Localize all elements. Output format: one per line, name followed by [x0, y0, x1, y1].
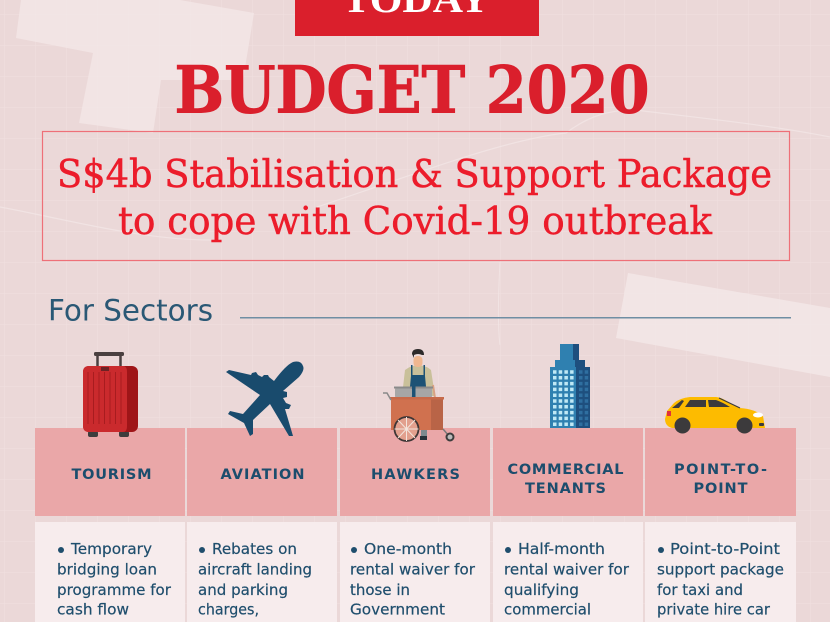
subtitle box [42, 132, 790, 260]
panel: tourism: TOURISM [72, 467, 152, 483]
heading: For Sectors: For Sectors [48, 294, 213, 328]
card: aviation detail: and parking [198, 582, 288, 599]
panel: commercial tenants: TENANTS [525, 481, 606, 497]
card: commercial tenants detail: commercial [504, 602, 591, 618]
panel: hawkers [340, 428, 490, 516]
panel: commercial tenants [493, 428, 643, 516]
panel: tourism [35, 428, 185, 516]
card: aviation detail: charges, [198, 602, 259, 618]
card: tourism detail: Temporary [70, 541, 152, 558]
panel: point-to-point: POINT [694, 481, 748, 497]
card: tourism detail: bridging loan [57, 562, 157, 578]
card: point-to-point detail: private hire car [657, 602, 771, 618]
card: commercial tenants detail: Half-month [518, 541, 605, 558]
card: tourism detail: cash flow [57, 602, 129, 618]
card: point-to-point detail [645, 522, 796, 622]
card: hawkers detail: rental waiver for [350, 562, 476, 578]
card: point-to-point detail: support package [657, 562, 784, 578]
card: commercial tenants detail: qualifying [504, 582, 579, 599]
card: hawkers detail: Government [350, 602, 445, 618]
card: point-to-point detail: Point-to-Point [670, 541, 780, 558]
card: hawkers detail: those in [350, 582, 410, 599]
title: BUDGET 2020 [174, 52, 650, 128]
card: commercial tenants detail: rental waiver for [504, 562, 630, 578]
card: aviation detail [187, 522, 337, 622]
subtitle box: S$4b Stabilisation & Support Package [57, 152, 772, 196]
icon: yellow car [665, 397, 765, 434]
panel: commercial tenants: COMMERCIAL [508, 462, 624, 478]
card: commercial tenants detail [493, 522, 643, 622]
icon: airplane [226, 362, 304, 436]
card: tourism detail [35, 522, 185, 622]
subtitle box: to cope with Covid-19 outbreak [118, 199, 713, 243]
icon: office tower [550, 344, 590, 428]
card: hawkers detail [340, 522, 490, 622]
icon: hawker with cart [383, 349, 454, 441]
card: aviation detail: aircraft landing [198, 562, 312, 578]
card: tourism detail: programme for [57, 582, 172, 599]
panel: hawkers: HAWKERS [371, 467, 460, 483]
panel: aviation [187, 428, 337, 516]
panel: point-to-point: POINT-TO- [674, 462, 767, 478]
logo: TODAY [295, 0, 539, 36]
icon: suitcase [83, 352, 138, 437]
panel: aviation: AVIATION [220, 467, 304, 483]
card: point-to-point detail: for taxi and [657, 582, 743, 599]
card: aviation detail: Rebates on [212, 541, 297, 558]
panel: point-to-point [645, 428, 796, 516]
card: hawkers detail: One-month [364, 541, 452, 558]
